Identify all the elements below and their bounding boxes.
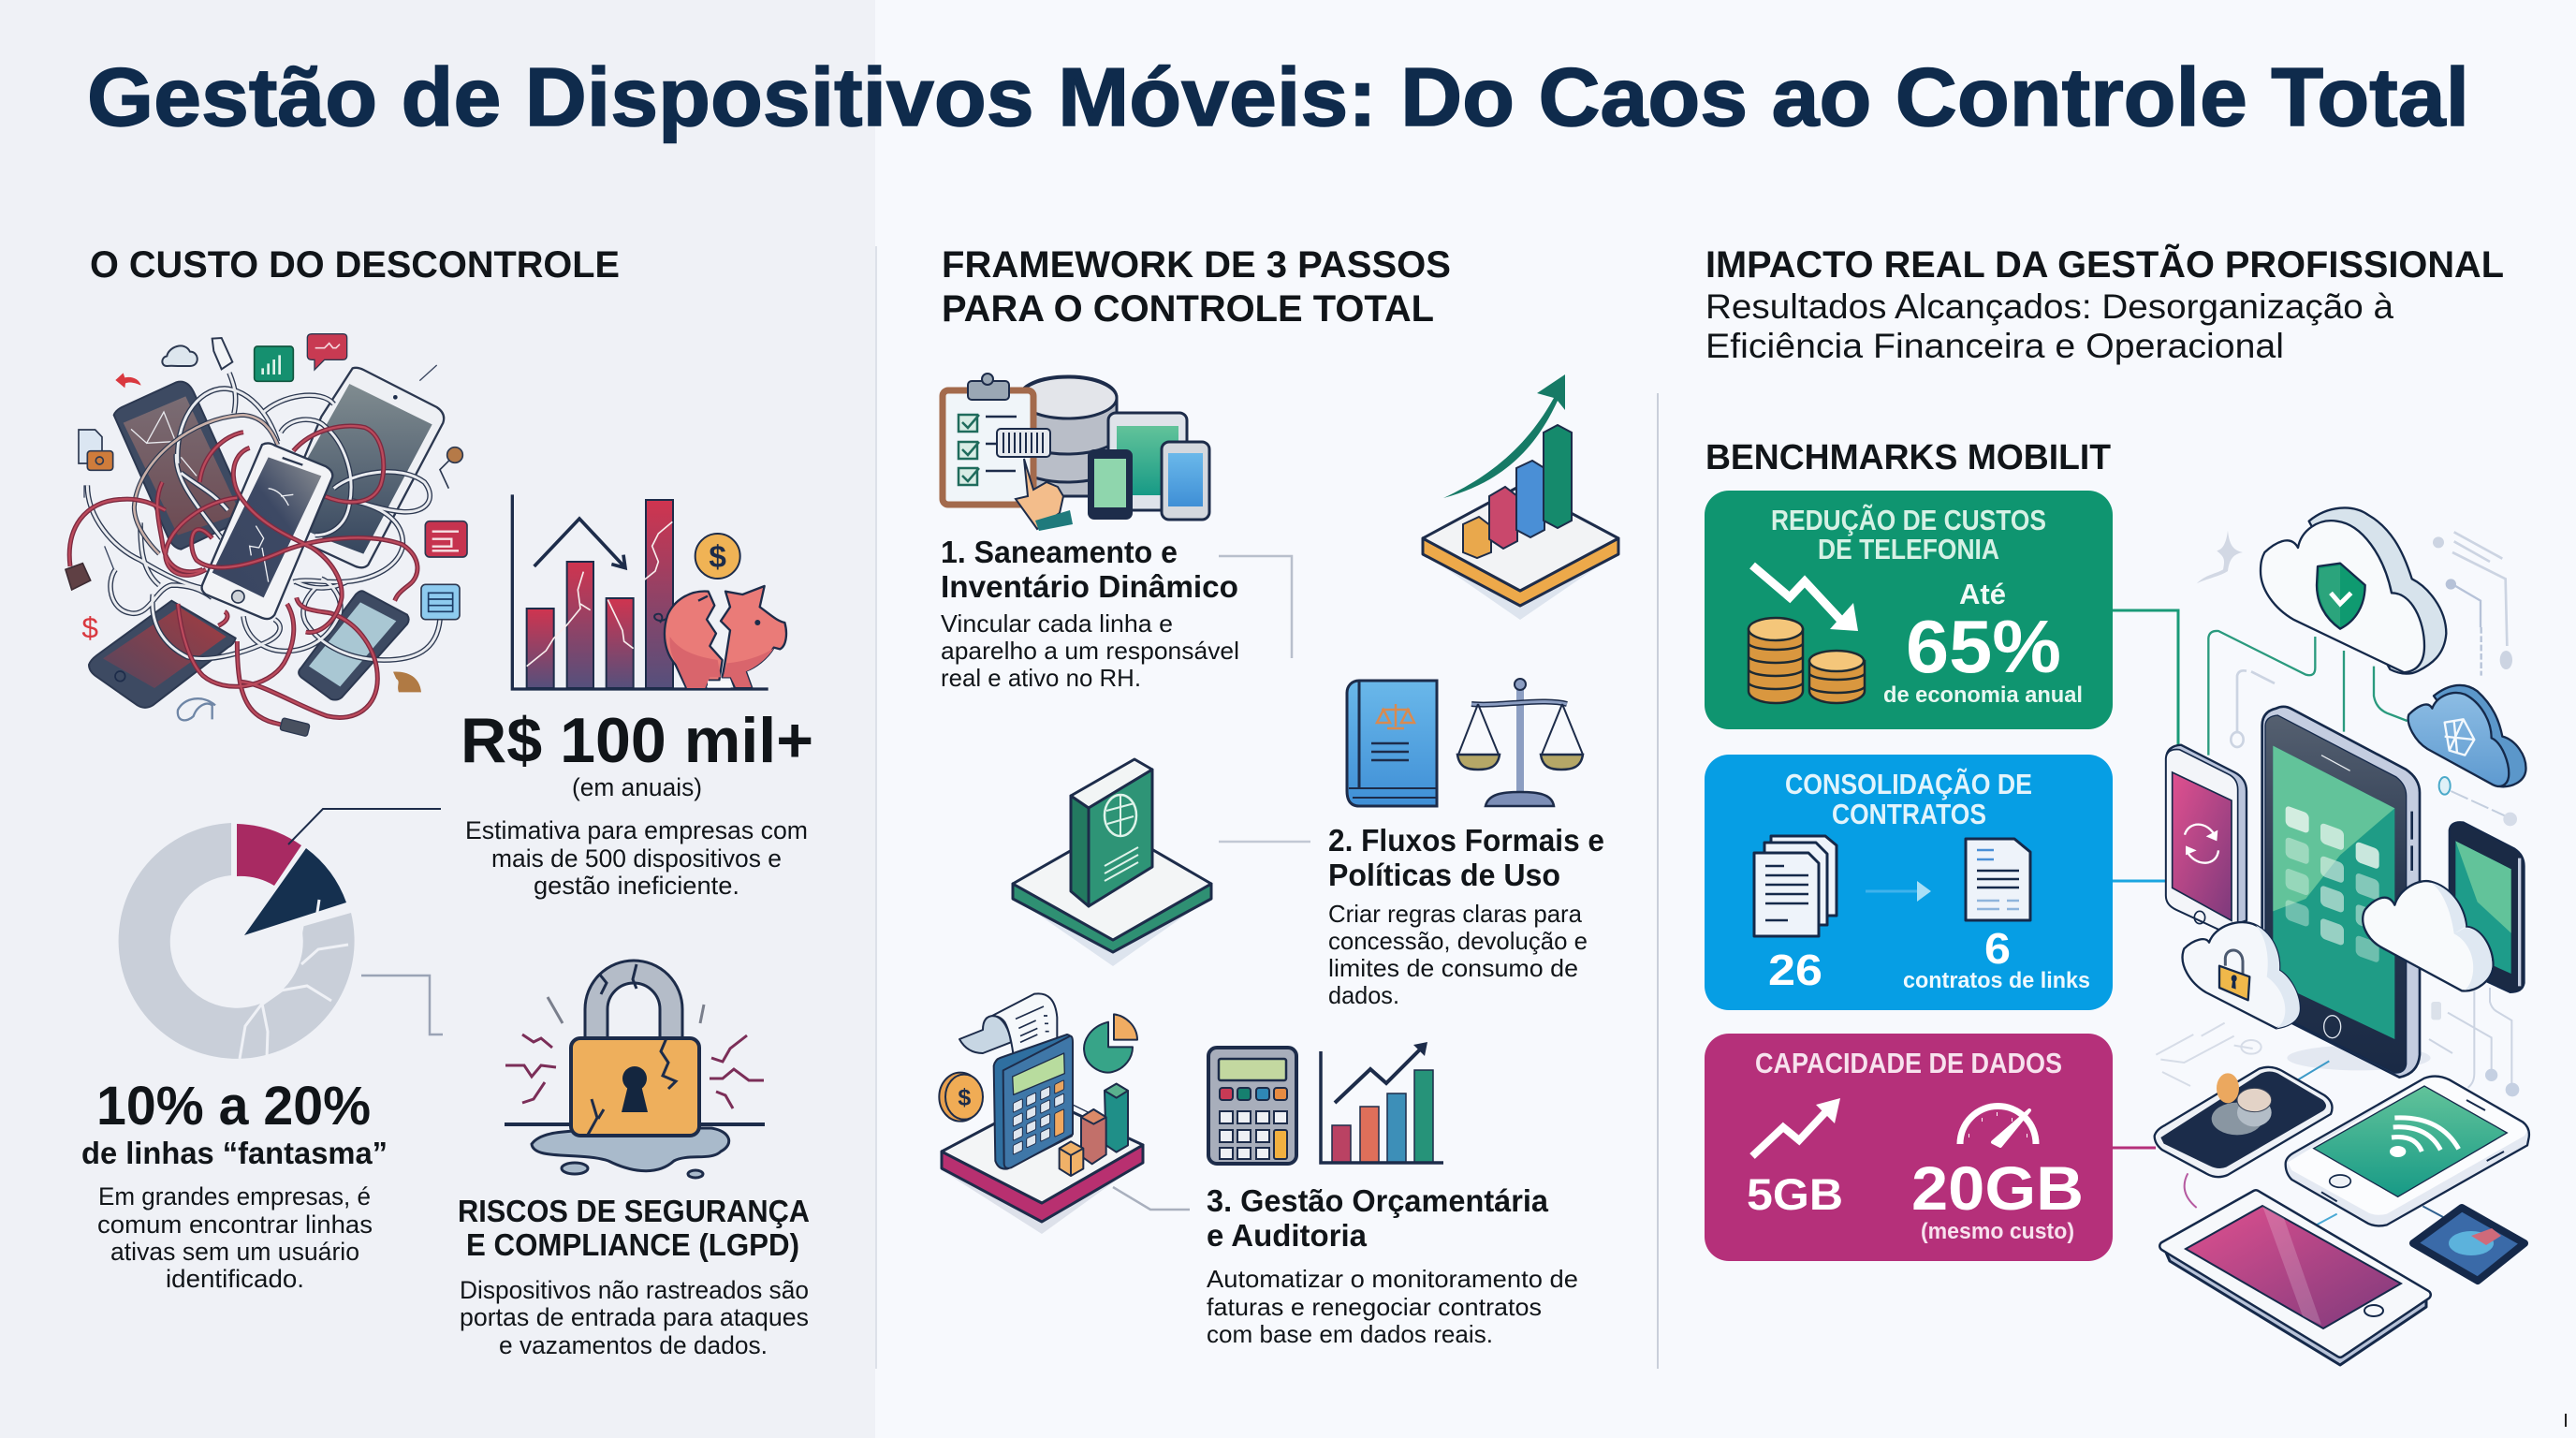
icon: cracked padlock (505, 964, 765, 1178)
card: consolidação de contratos: 26 (1768, 946, 1822, 994)
icon: isometric calculator with receipt (939, 993, 1143, 1234)
stat: custo anual: gestão ineficiente. (534, 872, 739, 900)
right phone (2450, 822, 2525, 992)
card: capacidade de dados: 20GB (1911, 1153, 2084, 1223)
card: redução de custos: 65% (1906, 605, 2061, 688)
icon: falling arrow (1752, 565, 1858, 631)
step 1 text: 1. Saneamento e (941, 535, 1178, 569)
circuit lines lower (2156, 988, 2519, 1226)
step 3 text: e Auditoria (1207, 1218, 1368, 1253)
divider left (875, 246, 877, 1369)
left phone with sync (2166, 745, 2247, 930)
step 3 text: 3. Gestão Orçamentária (1207, 1183, 1549, 1218)
blue cloud (2408, 685, 2525, 786)
card: capacidade de dados: CAPACIDADE DE DADOS (1755, 1047, 2062, 1079)
step 1 text: aparelho a um responsável (941, 637, 1239, 665)
heading: framework: PARA O CONTROLE TOTAL (942, 288, 1434, 330)
card: consolidação de contratos: CONSOLIDAÇÃO DE (1785, 768, 2032, 800)
stat: custo anual: mais de 500 dispositivos e (491, 844, 782, 873)
heading: o custo do descontrole: O CUSTO DO DESCONTROLE (90, 244, 620, 286)
stat: custo anual: Estimativa para empresas com (465, 816, 808, 844)
stat: custo anual: (em anuais) (572, 773, 702, 801)
heading: benchmarks: BENCHMARKS MOBILIT (1705, 438, 2111, 477)
step 1 text: Vincular cada linha e (941, 609, 1173, 638)
step 2 text: limites de consumo de (1328, 954, 1578, 982)
top cloud with shield (2261, 507, 2446, 674)
title: Gestão de Dispositivos Móveis: Do Caos ao Controle Total (87, 51, 2469, 143)
icon: clipboard, database and devices (943, 374, 1209, 531)
donut chart: linhas fantasma (119, 823, 355, 1059)
heading: impacto real: IMPACTO REAL DA GESTÃO PROFISSIONAL (1705, 242, 2504, 286)
icon: policy book (1347, 681, 1437, 806)
stat: linhas fantasma: de linhas “fantasma” (81, 1136, 388, 1170)
subtitle (1705, 287, 2393, 365)
small cursor mark (2565, 1414, 2567, 1427)
step 2 text: Criar regras claras para (1328, 900, 1583, 928)
step 3 text: faturas e renegociar contratos (1207, 1293, 1542, 1321)
connectors cards to devices (2113, 610, 2178, 1148)
card: consolidação de contratos: 6 (1984, 924, 2011, 973)
stat: custo anual: R$ 100 mil+ (461, 705, 813, 776)
card: capacidade de dados: (mesmo custo) (1921, 1219, 2074, 1244)
step 1 text (941, 535, 1239, 692)
divider right (1657, 393, 1659, 1369)
subtitle: Eficiência Financeira e Operacional (1705, 327, 2284, 365)
text: riscos de segurança: Dispositivos não rastreados são (460, 1276, 809, 1304)
stat: linhas fantasma: ativas sem um usuário (110, 1238, 359, 1266)
connector step 3 (1113, 1187, 1190, 1210)
icon: isometric calculator with receipt: $ (958, 1085, 971, 1111)
icon: isometric growth chart (1423, 374, 1618, 620)
text: riscos de segurança: RISCOS DE SEGURANÇA (458, 1194, 810, 1228)
card: consolidação de contratos: CONTRATOS (1832, 798, 1986, 830)
card: redução de custos: Até (1959, 578, 2006, 610)
icon: gauge (1960, 1107, 2036, 1146)
arrow: 26 to 6 (1866, 881, 1931, 902)
step 2 text: 2. Fluxos Formais e (1328, 823, 1604, 858)
step 2 text: concessão, devolução e (1328, 927, 1588, 955)
icon: calculator (1208, 1048, 1296, 1164)
panel: framework de 3 passos (939, 244, 1618, 1348)
illustration: tangled phones and cables (66, 334, 467, 737)
card: capacidade de dados (1705, 1034, 2113, 1261)
step 3 text (1207, 1183, 1578, 1348)
big tablet (2262, 707, 2431, 1078)
icon: stack of contracts (1754, 836, 1837, 936)
bar chart: budget (1321, 1042, 1443, 1163)
icon: scales of justice (1457, 679, 1583, 806)
circuit lines and decorations upper (2197, 531, 2517, 826)
connector to lock (361, 976, 443, 1034)
step 3 text: com base em dados reais. (1207, 1320, 1493, 1348)
card: redução de custos: DE TELEFONIA (1818, 533, 1999, 565)
card: consolidação de contratos (1705, 755, 2113, 1010)
small blue tile (2413, 1208, 2525, 1281)
card: redução de custos: de economia anual (1883, 682, 2083, 708)
card: consolidação de contratos: contratos de links (1903, 968, 2090, 993)
bar chart with broken piggy bank: $ (709, 540, 726, 575)
card: capacidade de dados: 5GB (1747, 1169, 1843, 1219)
connector step 2 (1219, 841, 1310, 843)
callout line to donut (288, 809, 441, 844)
card: redução de custos (1705, 491, 2113, 729)
stat: linhas fantasma: comum encontrar linhas (97, 1211, 373, 1239)
bar chart with broken piggy bank (512, 494, 786, 689)
stat: linhas fantasma: 10% a 20% (96, 1076, 371, 1137)
text: riscos de segurança: portas de entrada para ataques (460, 1303, 809, 1331)
text: riscos de segurança: e vazamentos de dados. (499, 1331, 768, 1359)
wifi phone (2286, 1077, 2529, 1225)
panel: impacto real (1705, 242, 2529, 1365)
bottom pink phone (2164, 1195, 2426, 1365)
step 3 text: Automatizar o monitoramento de (1207, 1265, 1578, 1293)
panel: o custo do descontrole (66, 244, 813, 1359)
stat: linhas fantasma: identificado. (166, 1265, 304, 1293)
icon: book on platform (1013, 759, 1211, 966)
step 1 text: Inventário Dinâmico (941, 569, 1238, 604)
step 2 text: dados. (1328, 981, 1399, 1009)
heading: framework: FRAMEWORK DE 3 PASSOS (942, 244, 1451, 286)
card: redução de custos: REDUÇÃO DE CUSTOS (1771, 504, 2046, 536)
heading: framework (942, 244, 1451, 330)
text: riscos de segurança: E COMPLIANCE (LGPD) (466, 1227, 799, 1262)
icon: coin stacks (1749, 618, 1865, 703)
dark flat phone (2155, 1067, 2332, 1177)
stat: linhas fantasma (81, 1076, 388, 1293)
middle cloud (2363, 881, 2493, 990)
lock cloud (2183, 922, 2300, 1028)
step 1 text: real e ativo no RH. (941, 664, 1141, 692)
icon: single contract (1966, 839, 2030, 920)
icon: rising arrow (1752, 1098, 1840, 1156)
illustration: tangled phones and cables: $ (81, 611, 98, 645)
stat: linhas fantasma: Em grandes empresas, é (98, 1182, 371, 1211)
stat: custo anual (461, 705, 813, 900)
step 2 text (1328, 823, 1604, 1009)
illustration: connected devices and clouds (2155, 507, 2529, 1365)
step 2 text: Políticas de Uso (1328, 858, 1560, 892)
subtitle: Resultados Alcançados: Desorganização à (1705, 287, 2393, 326)
text: riscos de segurança (458, 1194, 810, 1359)
connector step 1 (1219, 556, 1292, 658)
